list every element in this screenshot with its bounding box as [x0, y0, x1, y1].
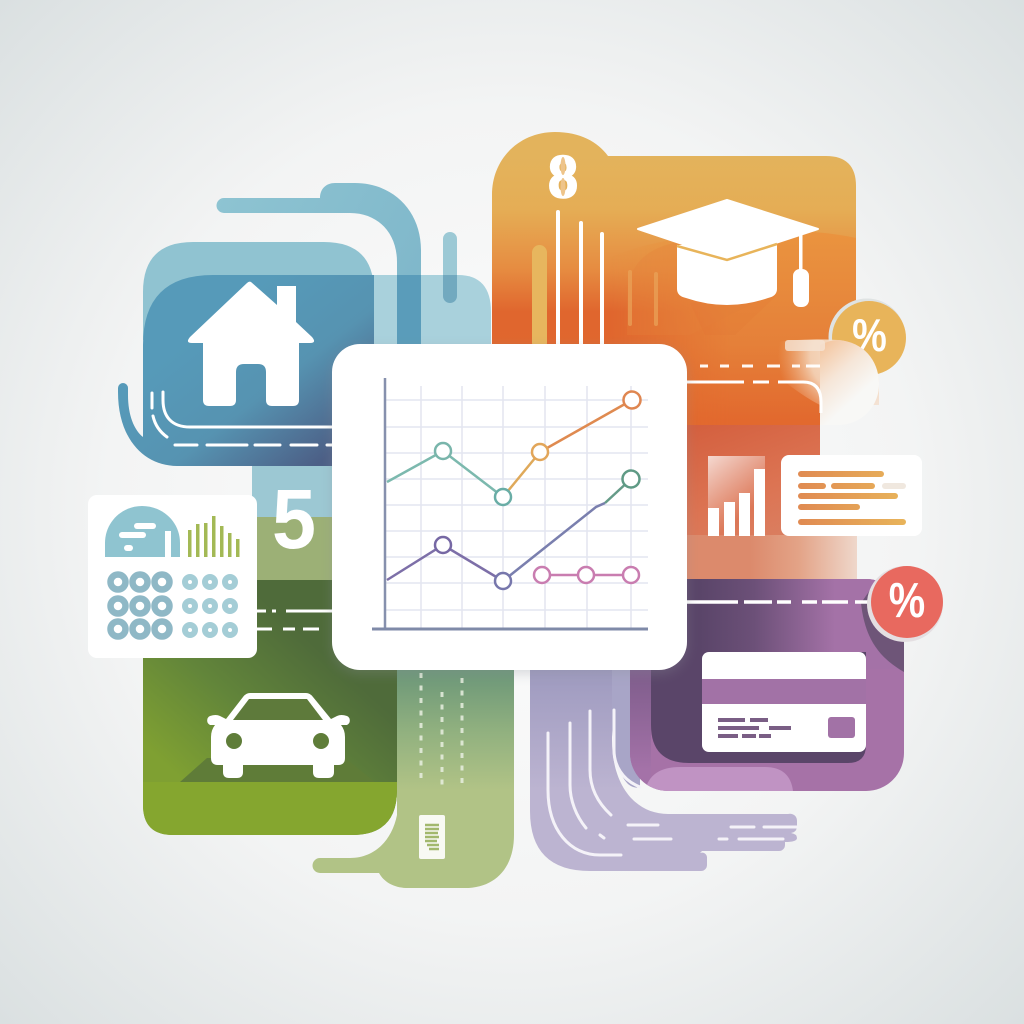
road dashes	[257, 611, 333, 629]
fog blob	[770, 339, 879, 425]
pale blue back panel	[143, 242, 374, 340]
icon: car	[207, 693, 350, 778]
icon: small document	[419, 815, 445, 859]
connector column	[252, 466, 333, 517]
light hump	[645, 767, 793, 791]
text card	[781, 455, 922, 536]
dark inner panel	[651, 652, 866, 763]
icon: bar chart	[708, 456, 765, 536]
red percent badge: %	[889, 572, 925, 628]
dark ring grid	[110, 574, 170, 636]
vertical lines	[532, 210, 604, 352]
blue front panel with tail	[118, 275, 374, 466]
panel: housing debt (blue)	[118, 183, 491, 466]
gold percent badge: %	[852, 310, 887, 362]
upper series	[387, 392, 640, 505]
faded salmon edge	[687, 535, 857, 580]
upper dark gradient	[685, 579, 876, 652]
icon: graduation cap	[638, 200, 818, 307]
panel: credit cards (purple)	[530, 566, 943, 871]
pink series	[534, 567, 639, 583]
line chart	[372, 378, 648, 629]
green strip with bottom tail	[312, 670, 514, 888]
mini bar chart	[188, 516, 240, 557]
numeral eight: 8	[548, 145, 578, 210]
lower salmon section	[687, 425, 820, 535]
road lines	[152, 392, 335, 445]
right orange wash	[649, 232, 856, 396]
pipe overlap	[397, 275, 421, 345]
dashed road lines	[687, 366, 821, 413]
calendar card	[88, 495, 257, 658]
strip white lines	[548, 710, 797, 855]
left column	[630, 670, 651, 787]
translucent pill	[785, 340, 825, 351]
light ring grid	[185, 577, 235, 635]
dashed line	[687, 600, 870, 604]
small blue pill	[443, 232, 457, 303]
pale blue connector	[374, 275, 491, 345]
purple strip	[530, 670, 797, 871]
purple panel	[630, 579, 904, 791]
panel: student loans (orange)	[492, 132, 922, 580]
axes	[384, 378, 386, 629]
corner shade	[861, 590, 904, 672]
red percent badge	[867, 566, 943, 642]
icon: dome	[105, 506, 180, 557]
faint vertical bars	[628, 270, 658, 326]
sage block	[252, 517, 333, 580]
panel: car loans (green)	[143, 466, 514, 888]
orange panel body	[492, 132, 856, 430]
faint shape behind cap	[627, 242, 760, 335]
icon: house	[188, 282, 314, 406]
icon: credit card	[702, 652, 866, 752]
green panel	[143, 580, 397, 835]
lower series	[387, 470, 640, 589]
lower lighter band and road shadow	[143, 758, 397, 835]
numeral five: 5	[272, 472, 316, 566]
overlapping strip piece	[612, 670, 640, 788]
cap shadow	[690, 295, 777, 335]
blue connector pipe	[217, 183, 421, 345]
central chart panel	[332, 344, 687, 674]
gold percent badge	[828, 298, 906, 376]
strip dotted lines	[421, 673, 462, 788]
pill overlap	[443, 275, 457, 303]
